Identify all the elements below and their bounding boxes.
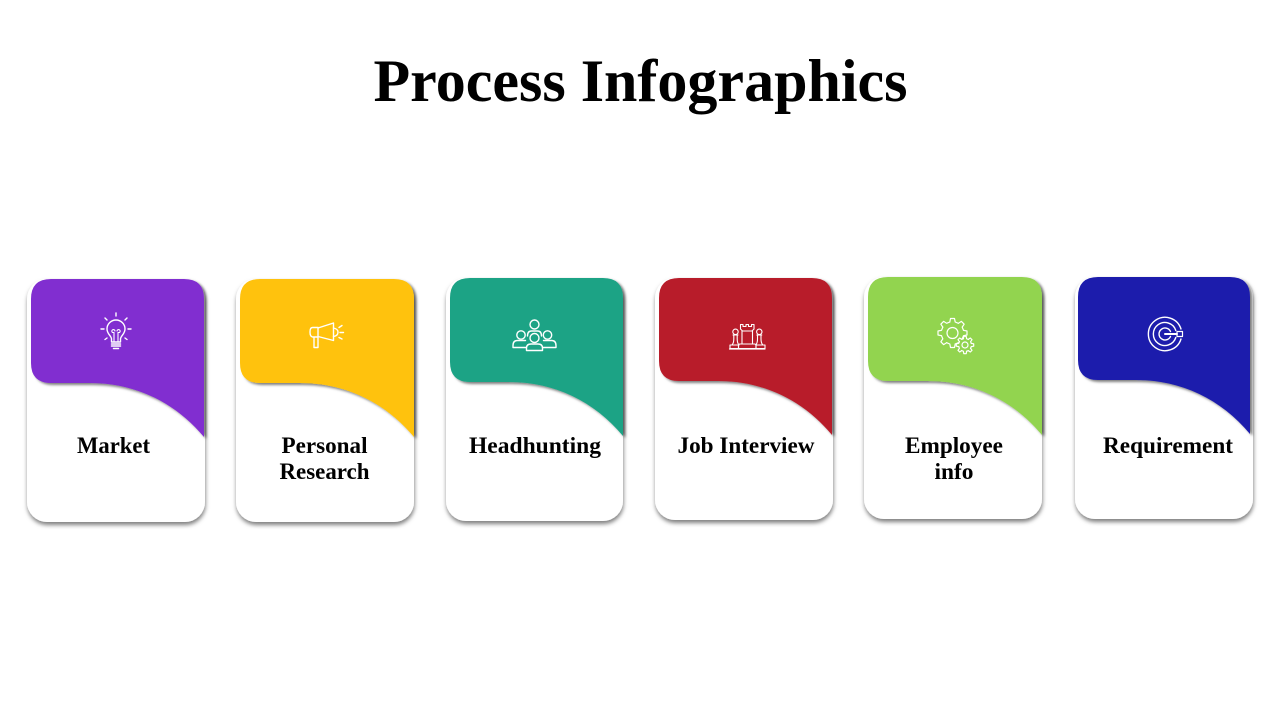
- icon: team: [513, 320, 556, 350]
- panel: yellow header: [240, 279, 414, 437]
- label: Requirement: Requirement: [1103, 433, 1233, 458]
- icon: megaphone: [310, 323, 344, 348]
- label: Employee info: info: [934, 459, 974, 484]
- label: Employee info: [905, 433, 1003, 484]
- label: Personal Research: Research: [280, 459, 370, 484]
- label: Headhunting: Headhunting: [469, 433, 602, 458]
- panel: green header: [450, 278, 623, 436]
- panel: purple header: [31, 279, 204, 437]
- card: Personal Research: [236, 279, 414, 522]
- panel: red header: [659, 278, 832, 435]
- label: Personal Research: [280, 433, 370, 484]
- label: Market: Market: [77, 433, 150, 458]
- icon: target: [1148, 317, 1182, 351]
- label: Job Interview: Job Interview: [678, 433, 815, 458]
- panel: navy header: [1078, 277, 1250, 434]
- card: Headhunting: [446, 278, 623, 521]
- icon: gears: [938, 318, 974, 354]
- card: Market: [27, 279, 205, 522]
- label: Personal Research: Personal: [282, 433, 368, 458]
- icon: light bulb: [101, 313, 131, 348]
- panel: lime header: [868, 277, 1042, 435]
- card: Employee info: [864, 277, 1042, 519]
- card: Requirement: [1075, 277, 1253, 519]
- card: Job Interview: [655, 278, 833, 520]
- icon: chess pieces: [730, 324, 765, 349]
- label: Employee info: Employee: [905, 433, 1003, 458]
- title: Process Infographics: [374, 48, 908, 114]
